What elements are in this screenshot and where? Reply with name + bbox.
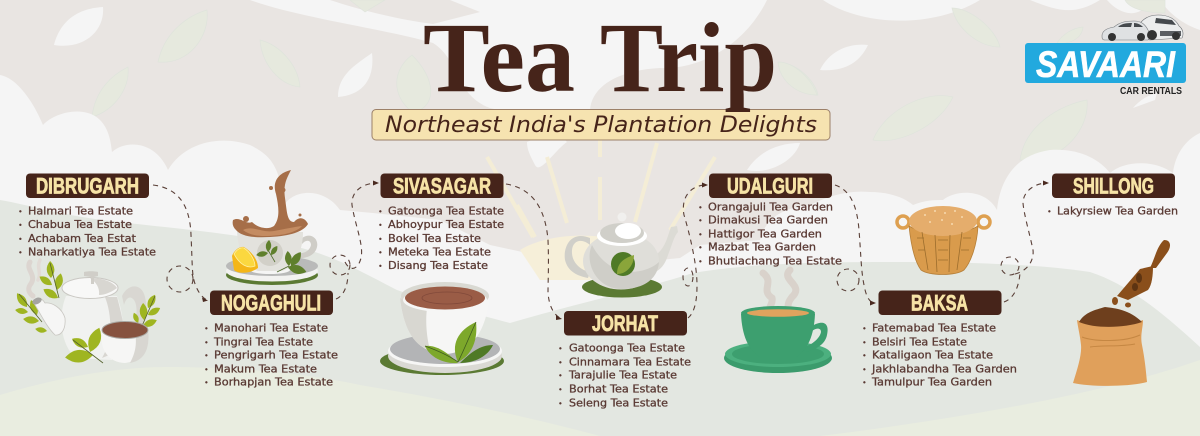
list: • (698, 216, 703, 226)
logo: Savaari car rentals (1025, 15, 1186, 97)
list: • (698, 204, 703, 212)
list: Abhoypur Tea Estate (388, 219, 504, 231)
list: • (862, 324, 867, 334)
panel: Shillong (1047, 174, 1178, 218)
list: Belsiri Tea Estate (872, 336, 967, 348)
list: Makum Tea Estate (214, 364, 317, 376)
icon: woven basket (897, 206, 990, 274)
list: Fatemabad Tea Estate (872, 322, 996, 334)
list: Bhutiachang Tea Estate (708, 256, 842, 268)
list: Gatoonga Tea Estate (388, 206, 504, 218)
title: Trip (600, 2, 777, 113)
list: • (558, 400, 563, 408)
list: • (698, 244, 703, 252)
list: • (378, 235, 383, 244)
list: Orangajuli Tea Garden (708, 202, 833, 214)
list: Lakyrsiew Tea Garden (1057, 206, 1178, 218)
list: Cinnamara Tea Estate (569, 356, 691, 368)
list (18, 206, 156, 258)
header: NOGAGHULI (221, 290, 321, 316)
list: • (558, 358, 563, 368)
icon: grey teapot on green base (565, 212, 678, 298)
arrow: Nogaghuli to Sivasagar (330, 180, 379, 299)
list: • (862, 338, 867, 348)
icon: large tea cup on saucer (380, 282, 504, 375)
list: Tamulpur Tea Garden (871, 376, 992, 388)
list: • (378, 221, 383, 230)
list: Hattigor Tea Garden (708, 228, 822, 240)
icon: green tea cup with steam (724, 270, 832, 373)
list: • (378, 248, 383, 258)
title: Tea (423, 2, 575, 113)
list: Gatoonga Tea Estate (569, 342, 685, 354)
list: Borhat Tea Estate (569, 384, 668, 396)
list: • (18, 235, 23, 244)
list: • (558, 344, 563, 354)
list: Tarajulie Tea Estate (568, 370, 677, 382)
list: Halmari Tea Estate (28, 206, 133, 218)
list (862, 322, 1017, 388)
list: • (18, 208, 23, 216)
green hills (0, 200, 1200, 436)
list: Disang Tea Estate (388, 260, 488, 272)
header (878, 290, 1002, 316)
icon: splashing tea cup with lemon (226, 170, 318, 285)
panel: Sivasagar (378, 174, 504, 272)
list: • (558, 386, 563, 394)
subtitle banner: Northeast India's Plantation Delights (385, 113, 817, 138)
panel: Baksa (862, 290, 1017, 388)
header: JORHAT (592, 311, 658, 336)
list: Bokel Tea Estate (388, 233, 481, 245)
list: • (204, 366, 209, 374)
list (558, 342, 691, 410)
arrow: Dibrugarh to Nogaghuli (153, 185, 208, 302)
icon: sack with scoop (1073, 240, 1170, 386)
list: • (204, 378, 209, 388)
list: Chabua Tea Estate (28, 219, 132, 231)
title (423, 2, 777, 113)
list: • (1047, 208, 1052, 216)
panel: Dibrugarh (18, 174, 156, 258)
panel: Udalguri (698, 174, 842, 268)
list (204, 322, 338, 388)
icon: white teapot with leaves and cup (14, 260, 162, 364)
logo: Savaari car rentals: SAVAARI (1036, 44, 1176, 85)
list (378, 206, 504, 272)
list: • (862, 352, 867, 360)
list: • (204, 324, 209, 334)
list: Achabam Tea Estat (28, 233, 136, 245)
list: • (18, 221, 23, 230)
header: SHILLONG (1073, 174, 1154, 198)
list: Seleng Tea Estate (569, 398, 668, 410)
arrow: Jorhat to Udalguri (683, 182, 708, 318)
list: Meteka Tea Estate (388, 246, 491, 258)
arrow: Baksa to Shillong (1001, 180, 1049, 302)
list: • (698, 230, 703, 240)
list: • (558, 372, 563, 380)
panel: Jorhat (558, 311, 691, 410)
header: SIVASAGAR (393, 174, 491, 198)
list: Tingrai Tea Estate (213, 336, 313, 348)
panel: Nogaghuli (204, 290, 338, 388)
list: Pengrigarh Tea Estate (214, 350, 338, 362)
header: BAKSA (911, 290, 968, 316)
header: DIBRUGARH (36, 174, 139, 198)
list: • (862, 366, 867, 374)
list: Dimakusi Tea Garden (708, 214, 828, 226)
list: Mazbat Tea Garden (708, 242, 816, 254)
list: Borhapjan Tea Estate (214, 376, 333, 388)
list: Manohari Tea Estate (214, 322, 328, 334)
header: UDALGURI (727, 174, 813, 198)
list (698, 202, 842, 268)
list: • (378, 208, 383, 216)
list: • (204, 352, 209, 360)
list: • (18, 248, 23, 258)
list: Naharkatiya Tea Estate (28, 246, 156, 258)
list: Jakhlabandha Tea Garden (871, 364, 1017, 376)
list: • (204, 338, 209, 348)
list: • (698, 258, 703, 266)
arrow: Udalguri to Baksa (835, 185, 876, 306)
logo: Savaari car rentals: CAR RENTALS (1120, 85, 1182, 97)
arrow: Sivasagar to Jorhat (506, 184, 562, 320)
list: • (862, 378, 867, 388)
list: • (378, 262, 383, 271)
list: Kataligaon Tea Estate (872, 350, 993, 362)
